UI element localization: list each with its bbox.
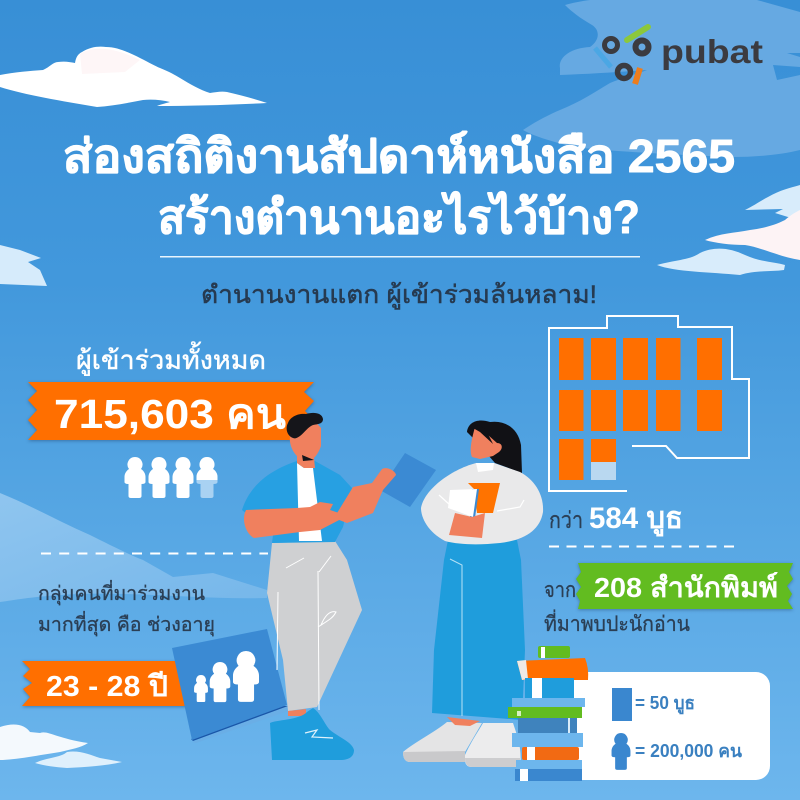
man: sock <box>288 709 306 716</box>
legend panel <box>555 672 770 780</box>
ribbon: total attendees <box>28 382 314 440</box>
legend: person icon <box>612 733 630 770</box>
woman: sweater <box>421 463 543 544</box>
logo: pubat: pubat <box>661 33 763 70</box>
man: hair <box>287 413 323 438</box>
ribbon: publishers <box>576 563 793 609</box>
booth count <box>549 502 683 537</box>
cloud right upper <box>745 185 800 218</box>
woman: hands <box>449 513 485 538</box>
title: สร้างตำนานอะไรไว้บ้าง? <box>158 191 640 243</box>
woman figure <box>403 420 543 767</box>
logo: pubat <box>595 27 763 84</box>
icon: attendee people <box>124 457 218 498</box>
text: largest age group: มากที่สุด คือ ช่วงอายุ <box>38 611 215 637</box>
man figure <box>242 413 396 760</box>
book with age icons <box>172 629 288 743</box>
handheld book <box>380 453 436 507</box>
woman: hair back <box>467 420 522 473</box>
legend: booth text: = 50 บูธ <box>635 693 695 715</box>
ribbon: total attendees: 715,603 คน <box>54 391 286 437</box>
subtitle: ตำนานงานแตก ผู้เข้าร่วมล้นหลาม! <box>201 281 597 310</box>
woman: face <box>471 427 502 459</box>
ribbon: age group <box>22 661 195 706</box>
woman: shoes <box>403 722 482 762</box>
heading: total attendees: ผู้เข้าร่วมทั้งหมด <box>76 341 266 376</box>
cloud right middle <box>705 210 800 260</box>
ribbon: age group: 23 - 28 ปี <box>46 671 168 703</box>
background hill left <box>0 493 267 602</box>
legend: person text: = 200,000 คน <box>635 741 743 761</box>
background light clouds top right <box>523 0 800 157</box>
publisher text end: ที่มาพบปะนักอ่าน <box>544 609 690 636</box>
stack of books <box>508 646 588 781</box>
booth count: 584 บูธ <box>589 502 683 537</box>
woman: paper <box>448 489 477 517</box>
man: jacket <box>242 461 352 543</box>
text: largest age group: กลุ่มคนที่มาร่วมงาน <box>38 580 205 606</box>
man: neck and face <box>290 418 321 468</box>
man: right arm and hand <box>334 468 396 523</box>
legend: booth icon <box>612 688 632 721</box>
cloud left <box>0 245 47 286</box>
floor plan <box>549 316 749 491</box>
cloud right lower <box>657 249 785 275</box>
cloud bottom left small <box>35 752 122 768</box>
cloud bottom left <box>0 725 88 760</box>
man: shirt <box>297 463 322 541</box>
woman: skirt <box>432 540 525 720</box>
title divider <box>160 256 640 258</box>
man: left arm and hand <box>244 502 345 538</box>
publisher text start: จาก <box>544 579 576 602</box>
text: largest age group <box>38 580 215 637</box>
man: shoe <box>270 708 354 760</box>
ribbon: publishers: 208 สำนักพิมพ์ <box>594 572 778 603</box>
cloud top left <box>0 47 267 107</box>
booth count: กว่า <box>549 507 583 533</box>
title <box>63 130 735 243</box>
man: beard line <box>302 455 314 461</box>
woman: orange book <box>468 483 500 513</box>
man: trousers <box>267 541 362 711</box>
title: ส่องสถิติงานสัปดาห์หนังสือ 2565 <box>63 130 735 182</box>
